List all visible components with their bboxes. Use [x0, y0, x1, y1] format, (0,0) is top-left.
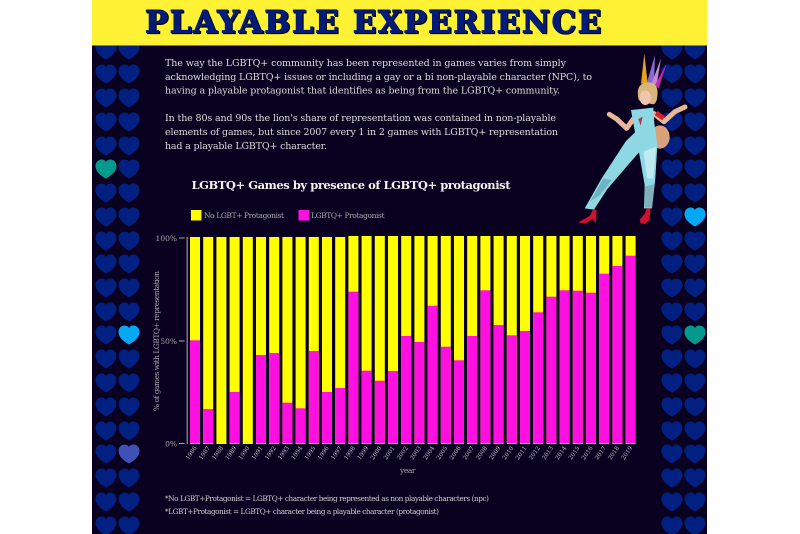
intro text: In the 80s and 90s the lion's share of representation was contained in non-playable [165, 113, 556, 124]
x axis title: year [399, 466, 416, 475]
x axis year labels: 2008 [476, 445, 489, 461]
title banner [92, 0, 707, 46]
y axis: 100% [156, 234, 177, 243]
x axis year labels: 1986 [185, 445, 199, 461]
x axis year labels: 2000 [370, 445, 384, 461]
x axis year labels: 2003 [410, 445, 423, 461]
x axis year labels: 2005 [436, 445, 450, 461]
y axis: 50% [160, 337, 177, 346]
x axis year labels: 1997 [330, 445, 344, 461]
x axis year labels: 2009 [489, 445, 502, 461]
x axis year labels: 2001 [383, 446, 397, 461]
x axis year labels: 1987 [198, 445, 212, 461]
footnotes: *No LGBT+Protagonist = LGBTQ+ character being represented as non playable characters (npc) [165, 494, 489, 503]
x axis year labels: 1989 [225, 445, 238, 461]
y axis [152, 234, 188, 448]
legend [191, 210, 384, 220]
x axis year labels: 2002 [396, 445, 410, 461]
x axis year labels: 1995 [304, 445, 318, 461]
yellow bars: no LGBT+ protagonist [190, 236, 636, 444]
chart heading: LGBTQ+ Games by presence of LGBTQ+ protagonist [192, 178, 511, 192]
x axis year labels: 2007 [462, 445, 476, 461]
x axis year labels: 1993 [278, 445, 291, 461]
x axis year labels: 2019 [621, 445, 634, 461]
x axis year labels: 2015 [568, 445, 582, 461]
x axis year labels: 2016 [581, 445, 595, 461]
illustration: character with feather headdress [578, 53, 685, 224]
intro text [165, 58, 592, 152]
x axis year labels: 1992 [264, 445, 278, 461]
intro text: having a playable protagonist that identifies as being from the LGBTQ+ community. [165, 86, 560, 96]
title banner: PLAYABLE EXPERIENCE [145, 5, 601, 41]
x axis year labels: 1991 [251, 446, 265, 461]
x axis year labels: 2018 [608, 445, 621, 461]
x axis year labels: 2006 [449, 445, 463, 461]
x axis year labels: 2004 [423, 445, 436, 461]
stacked bar chart [190, 236, 636, 444]
x axis year labels: 1998 [344, 445, 357, 461]
x axis year labels: 2017 [594, 445, 608, 461]
heart pattern: left [96, 40, 140, 534]
x axis year labels: 1996 [317, 445, 331, 461]
intro text: acknowledging LGBTQ+ issues or including a gay or a bi non-playable character (NPC), to [165, 72, 592, 83]
footnotes [165, 494, 489, 516]
y axis: % of games with LGBTQ+ representation [152, 271, 161, 411]
intro text: elements of games, but since 2007 every 1 in 2 games with LGBTQ+ representation [165, 127, 558, 138]
heart pattern: right [662, 40, 706, 534]
legend: LGBTQ+ Protagonist [311, 211, 384, 220]
x axis year labels: 2013 [542, 445, 555, 461]
x axis year labels: 2012 [528, 445, 542, 461]
x axis year labels: 1999 [357, 445, 370, 461]
x axis year labels: 1990 [238, 445, 252, 461]
title banner: PLAYABLE EXPERIENCE [146, 5, 602, 41]
x axis year labels: 2014 [555, 445, 568, 461]
intro text: had a playable LGBTQ+ character. [165, 141, 327, 152]
y axis: 0% [165, 440, 177, 448]
page background [92, 0, 707, 534]
intro text: The way the LGBTQ+ community has been represented in games varies from simply [165, 58, 567, 69]
legend: No LGBT+ Protagonist [204, 211, 284, 220]
magenta bars: LGBTQ+ protagonist [190, 256, 636, 444]
x axis year labels: 1994 [291, 445, 304, 461]
x axis year labels: 1988 [212, 445, 225, 461]
x axis year labels: 2011 [515, 446, 529, 461]
x axis year labels [185, 445, 634, 461]
footnotes: *LGBT+Protagonist = LGBTQ+ character being a playable character (protagonist) [165, 507, 439, 516]
x axis year labels: 2010 [502, 445, 516, 461]
